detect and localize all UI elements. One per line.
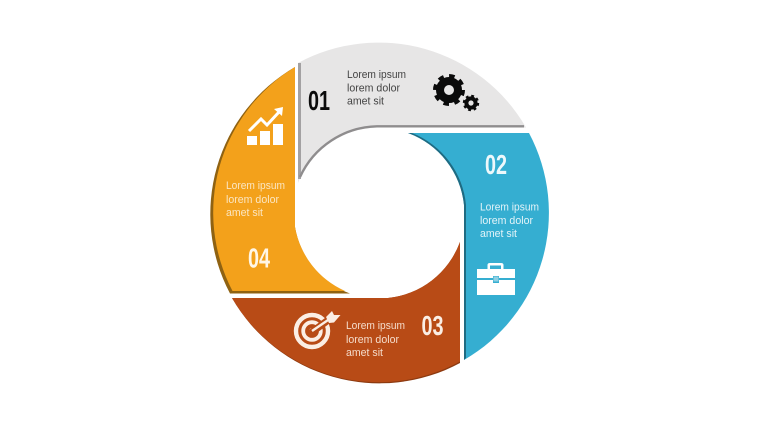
text block 04: lorem dolor <box>226 194 279 206</box>
panel: segment 02 <box>408 133 549 360</box>
text block 02 <box>480 202 539 240</box>
number 01: 01 <box>308 85 330 116</box>
text block 04: amet sit <box>226 207 263 219</box>
number 04: 04 <box>248 242 270 274</box>
text block 01 <box>347 69 406 108</box>
panel: segment 01 <box>298 43 526 183</box>
icon: briefcase <box>477 263 515 295</box>
number 03: 03 <box>422 310 444 341</box>
text block 03 <box>346 320 405 359</box>
text block 01: lorem dolor <box>347 82 400 94</box>
text block 02: lorem dolor <box>480 215 533 227</box>
text block 03: lorem dolor <box>346 334 399 346</box>
icon: growth chart <box>247 107 283 145</box>
text block 04 <box>226 180 285 219</box>
text block 02: Lorem ipsum <box>480 202 539 214</box>
text block 01: Lorem ipsum <box>347 69 406 81</box>
text block 01: amet sit <box>347 96 384 108</box>
text block 02: amet sit <box>480 228 517 240</box>
icon: gears <box>435 76 478 110</box>
icon: target <box>296 311 340 347</box>
number 02: 02 <box>485 149 507 180</box>
panel: segment 03 <box>232 242 460 383</box>
text block 04: Lorem ipsum <box>226 180 285 192</box>
panel: segment 04 <box>210 67 350 294</box>
text block 03: Lorem ipsum <box>346 320 405 332</box>
text block 03: amet sit <box>346 347 383 359</box>
